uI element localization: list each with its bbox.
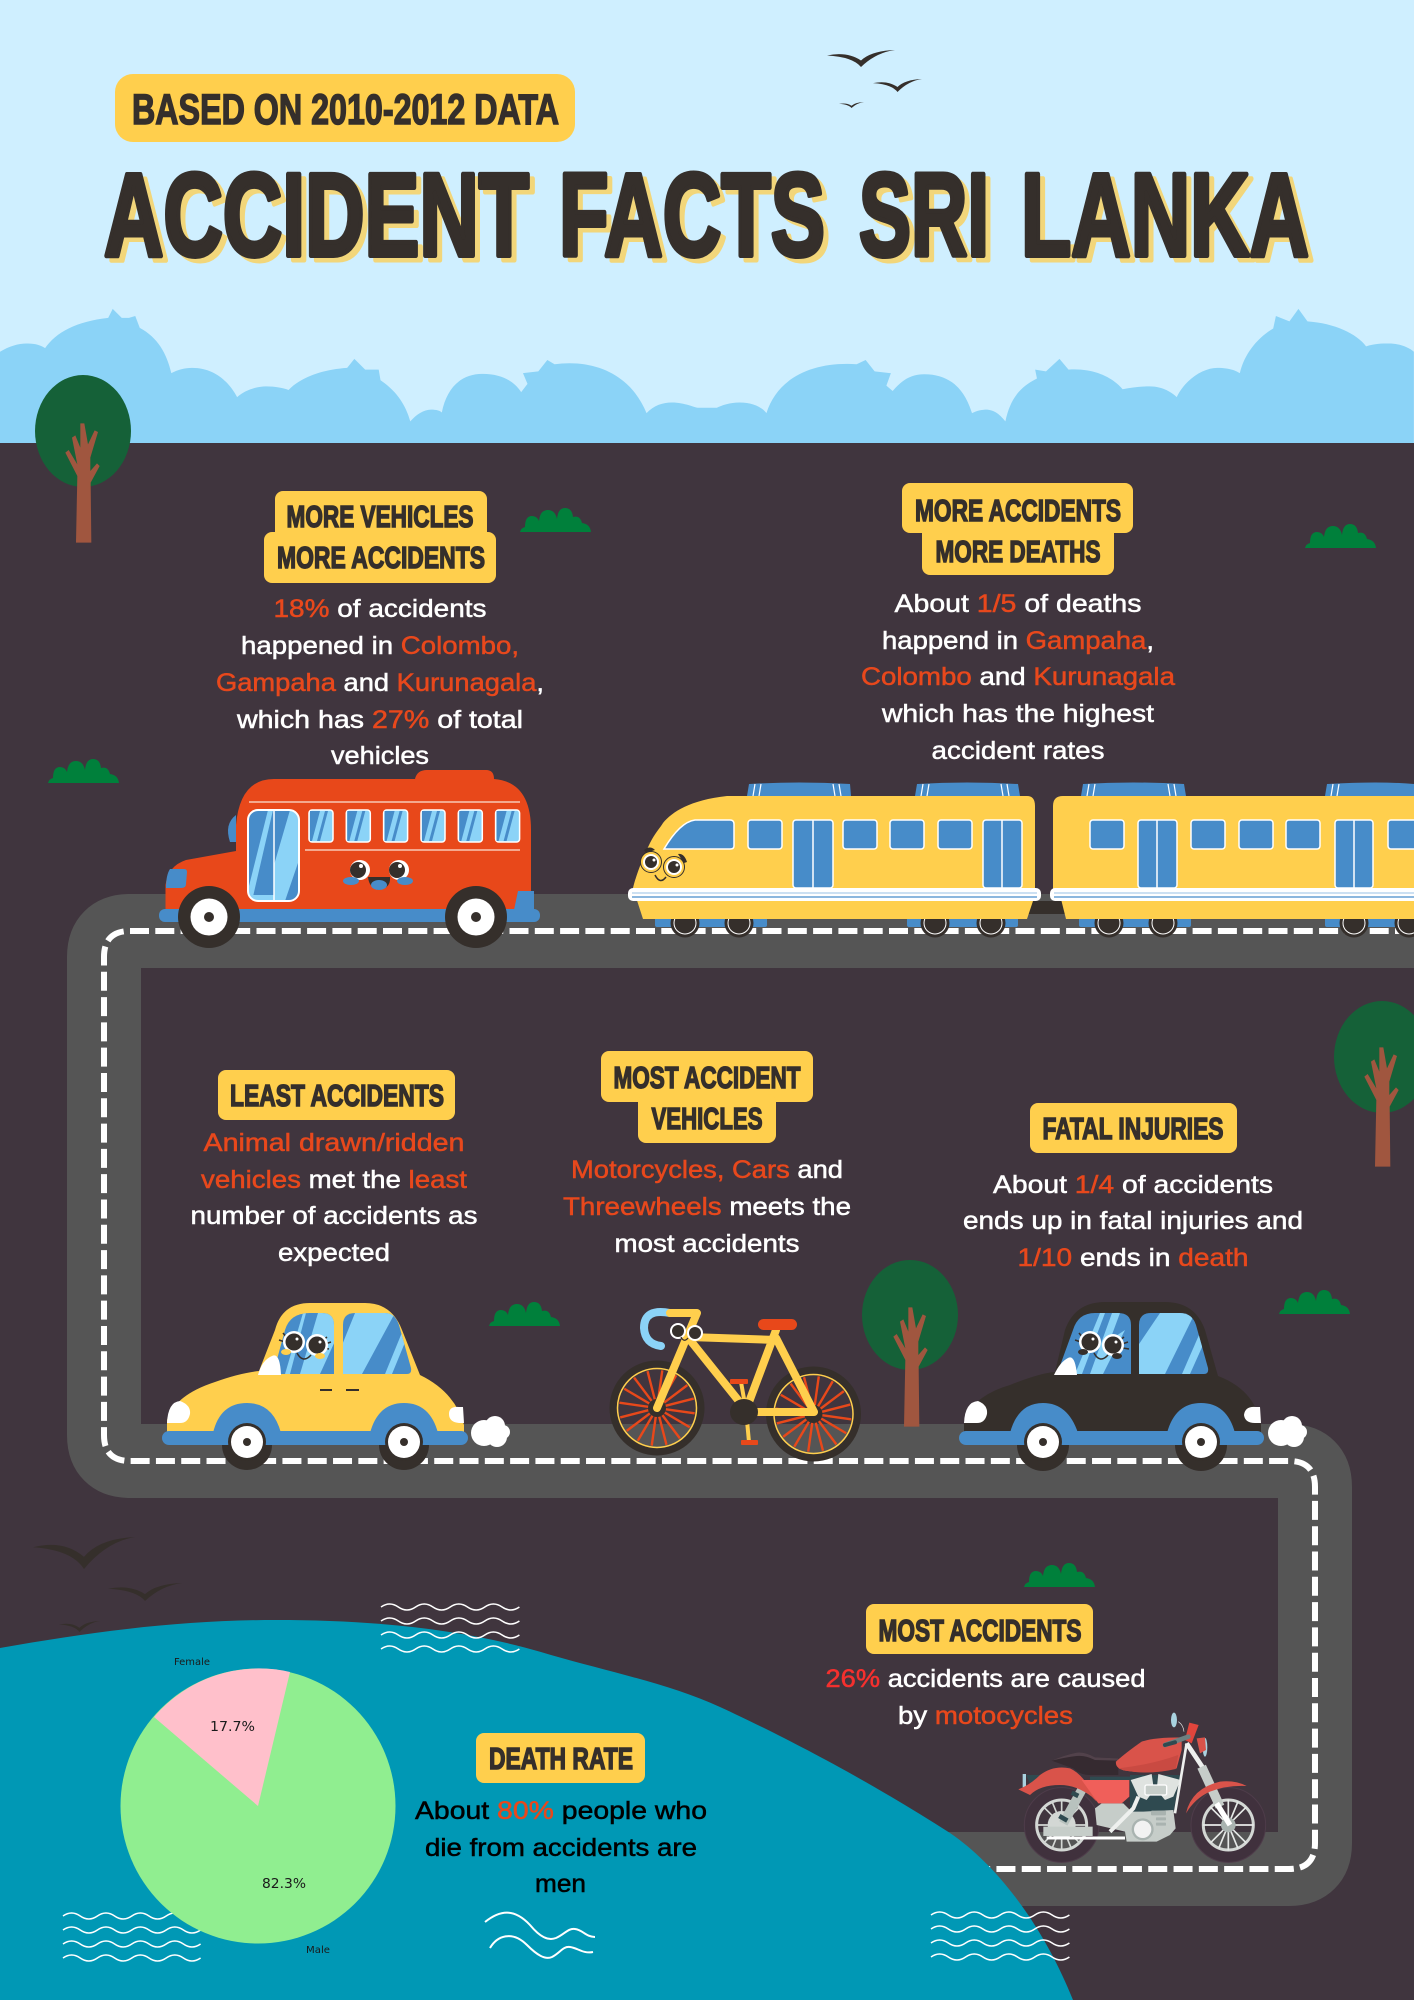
yellow car windows bbox=[273, 1313, 411, 1374]
panel: more vehicles more accidents bbox=[216, 491, 544, 770]
panel: least accidents: expected bbox=[278, 1239, 390, 1267]
vehicle: bicycle bbox=[614, 1312, 857, 1458]
panel: death rate bbox=[415, 1733, 707, 1898]
bike seat bbox=[758, 1319, 797, 1330]
panel: more vehicles more accidents: 18% of accidents bbox=[274, 595, 486, 623]
panel: most accident vehicles: most accidents bbox=[614, 1230, 800, 1258]
motorcycle handlebar and lamp bbox=[1165, 1713, 1207, 1757]
birds: top bbox=[827, 50, 922, 108]
tree: right edge bbox=[1334, 1001, 1414, 1167]
motorcycle front wheel bbox=[1191, 1788, 1266, 1862]
yellow car exhaust bbox=[471, 1416, 510, 1447]
panel: most accidents motorcycles bbox=[826, 1604, 1146, 1730]
yellow car face bbox=[279, 1331, 331, 1359]
panel: more vehicles more accidents: Gampaha and Kurunagala , bbox=[216, 669, 544, 697]
train cars bbox=[633, 796, 1035, 919]
pie chart: Female bbox=[174, 1657, 210, 1668]
pie chart: 82.3% bbox=[262, 1877, 306, 1892]
black car exhaust bbox=[1268, 1416, 1307, 1447]
panel: most accident vehicles bbox=[563, 1051, 851, 1258]
bus windows bbox=[309, 810, 520, 842]
motorcycle rear post bbox=[1026, 1775, 1043, 1783]
title lettering: SRI bbox=[859, 150, 989, 282]
birds: lower left bbox=[33, 1537, 182, 1632]
bike handlebar bbox=[644, 1312, 670, 1346]
vehicle: yellow car bbox=[162, 1303, 510, 1470]
panel: least accidents: number of accidents as bbox=[190, 1202, 478, 1230]
train windows bbox=[664, 820, 1414, 888]
panel: most accidents motorcycles: 26% accidents are caused bbox=[826, 1665, 1146, 1693]
panel: more accidents more deaths: MORE DEATHS bbox=[936, 534, 1100, 569]
panel: more accidents more deaths: happend in Gampaha , bbox=[882, 627, 1154, 655]
panel: fatal injuries: About 1/4 of accidents bbox=[993, 1171, 1273, 1199]
panel: least accidents: LEAST ACCIDENTS bbox=[230, 1078, 444, 1113]
title lettering bbox=[104, 150, 1309, 282]
title lettering: ACCIDENT bbox=[104, 150, 529, 282]
panel: fatal injuries: 1/10 ends in death bbox=[1018, 1244, 1248, 1272]
title bbox=[104, 150, 1314, 286]
panel: most accident vehicles: VEHICLES bbox=[652, 1101, 762, 1136]
panel: more vehicles more accidents: vehicles bbox=[331, 742, 429, 770]
yellow car wheels bbox=[222, 1423, 429, 1470]
waves: bottom left bbox=[63, 1913, 201, 1961]
bike face bbox=[670, 1323, 703, 1341]
bike front wheel bbox=[770, 1370, 857, 1458]
tree: top left bbox=[35, 375, 131, 543]
motorcycle rear wheel bbox=[1024, 1788, 1099, 1862]
title shadow: FACTS bbox=[564, 154, 830, 286]
motorcycle fork bbox=[1175, 1743, 1247, 1825]
road bbox=[104, 931, 1414, 1869]
train white band bbox=[628, 888, 1414, 901]
motorcycle frame bbox=[1130, 1775, 1180, 1813]
bus door bbox=[248, 810, 299, 901]
pie chart: Male bbox=[306, 1945, 330, 1956]
train roof units bbox=[747, 782, 1414, 796]
panel: fatal injuries bbox=[963, 1103, 1303, 1272]
waves: top bbox=[381, 1604, 519, 1652]
panel: more accidents more deaths: accident rates bbox=[932, 737, 1104, 765]
pie chart: 17.7% bbox=[210, 1720, 255, 1735]
bike frame bbox=[657, 1313, 814, 1412]
train undercarriage bbox=[655, 915, 1414, 927]
panel: more accidents more deaths: which has the highest bbox=[881, 700, 1154, 728]
bike rear wheel bbox=[614, 1364, 700, 1452]
panel: more accidents more deaths: MORE ACCIDENTS bbox=[915, 493, 1121, 528]
panel: more vehicles more accidents: MORE ACCIDENTS bbox=[277, 540, 485, 575]
panel: least accidents bbox=[190, 1070, 478, 1267]
bus wheels bbox=[178, 886, 507, 948]
panel: fatal injuries: ends up in fatal injuries and bbox=[963, 1207, 1303, 1235]
bus face bbox=[343, 860, 413, 890]
panel: least accidents: vehicles met the least bbox=[201, 1166, 467, 1194]
panel: more accidents more deaths: Colombo and Kurunagala bbox=[861, 663, 1175, 691]
title lettering: FACTS bbox=[559, 150, 825, 282]
motorcycle engine bbox=[1043, 1774, 1181, 1842]
waves: large centre bbox=[485, 1913, 595, 1958]
panel: more vehicles more accidents: happened in Colombo, bbox=[241, 632, 519, 660]
panel: most accident vehicles: Motorcycles, Cars and bbox=[571, 1156, 843, 1184]
panel: death rate: men bbox=[535, 1870, 586, 1898]
ground bbox=[0, 443, 1414, 2000]
pie chart bbox=[120, 1657, 396, 1956]
panel: more vehicles more accidents: MORE VEHICLES bbox=[286, 499, 474, 534]
sky background bbox=[0, 0, 1414, 443]
panel: death rate: About 80% people who bbox=[415, 1797, 707, 1825]
cloud silhouette bbox=[0, 309, 1414, 445]
subtitle badge bbox=[115, 74, 575, 142]
title shadow: ACCIDENT bbox=[109, 154, 534, 286]
panel: least accidents: Animal drawn/ridden bbox=[204, 1129, 464, 1157]
train connector bbox=[1028, 901, 1066, 914]
panel: fatal injuries: FATAL INJURIES bbox=[1042, 1111, 1224, 1146]
panel: more vehicles more accidents: which has 27% of total bbox=[236, 706, 523, 734]
panel: most accident vehicles: MOST ACCIDENT bbox=[614, 1060, 801, 1095]
panel: more accidents more deaths: About 1/5 of deaths bbox=[894, 590, 1142, 618]
panel: death rate: DEATH RATE bbox=[489, 1741, 633, 1776]
panel: most accidents motorcycles: MOST ACCIDENTS bbox=[878, 1613, 1082, 1648]
title shadow bbox=[109, 154, 1314, 286]
panel: most accidents motorcycles: by motocycles bbox=[898, 1702, 1073, 1730]
waves: bottom right bbox=[931, 1912, 1069, 1960]
train wheels bbox=[670, 908, 1414, 938]
black car wheels bbox=[1017, 1423, 1227, 1471]
panel: most accident vehicles: Threewheels meets the bbox=[563, 1193, 851, 1221]
vehicle: black car bbox=[959, 1302, 1307, 1471]
black car windows bbox=[1057, 1313, 1208, 1374]
bushes bbox=[48, 508, 1376, 1587]
train face bbox=[640, 848, 687, 881]
tree: centre bbox=[862, 1260, 958, 1427]
vehicle: motorcycle bbox=[1018, 1713, 1266, 1862]
vehicle: red bus bbox=[159, 770, 540, 948]
panel: death rate: die from accidents are bbox=[425, 1834, 697, 1862]
sea bbox=[0, 1620, 1073, 2000]
black car face bbox=[1075, 1331, 1129, 1359]
motorcycle bodywork bbox=[1018, 1737, 1182, 1803]
subtitle badge: BASED ON 2010-2012 DATA bbox=[132, 86, 559, 134]
vehicle: yellow train bbox=[628, 782, 1414, 938]
title shadow: SRI bbox=[864, 154, 994, 286]
panel: more accidents more deaths bbox=[861, 483, 1175, 765]
motorcycle shock bbox=[1063, 1790, 1082, 1823]
